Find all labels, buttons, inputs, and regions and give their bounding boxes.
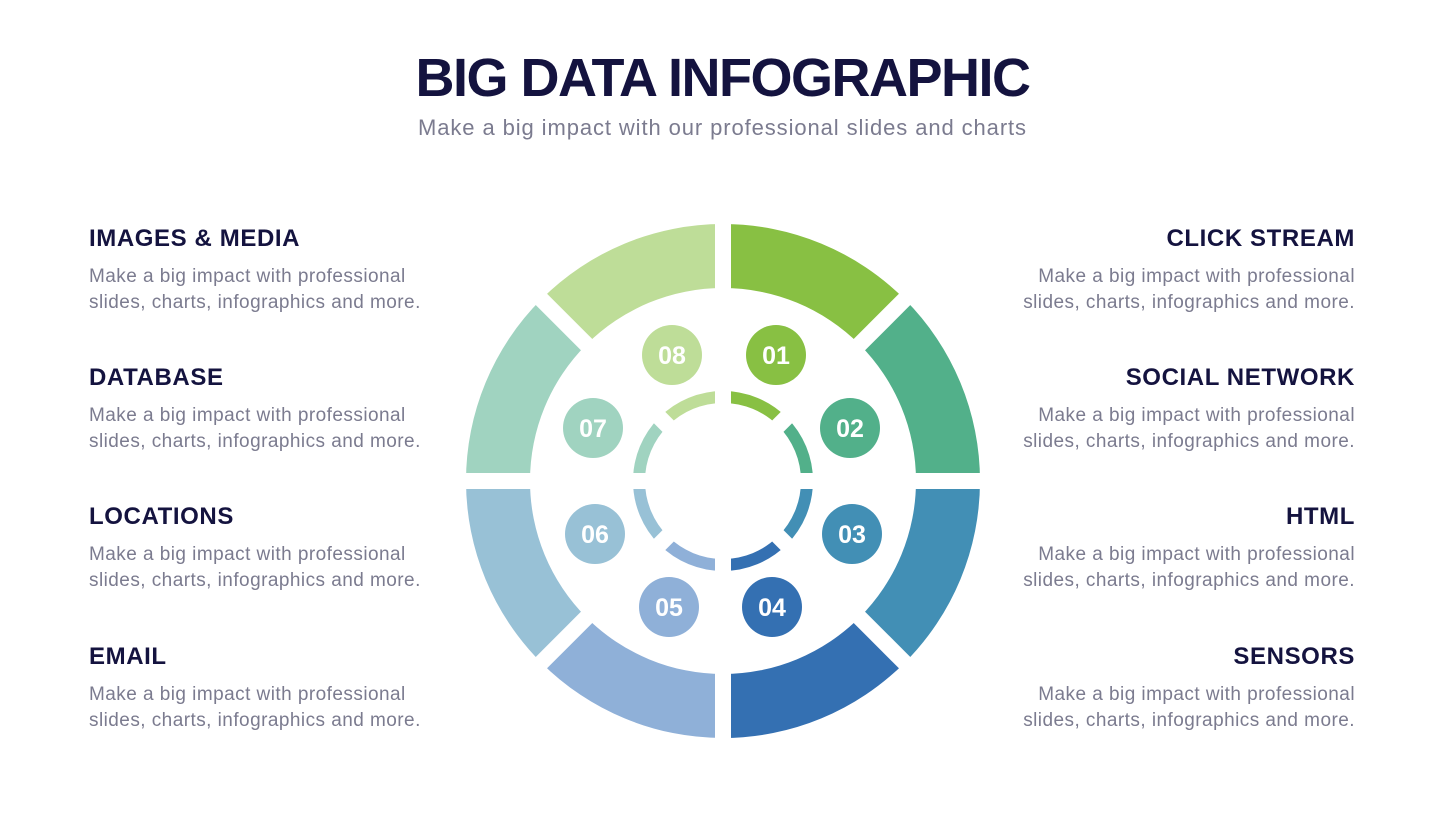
title: BIG DATA INFOGRAPHIC	[416, 48, 1029, 108]
item: locations	[89, 503, 421, 591]
item: images & media: slides, charts, infographics and more.	[89, 292, 421, 313]
item: images & media: Make a big impact with professional	[89, 266, 406, 287]
subtitle: Make a big impact with our professional slides and charts	[418, 115, 1027, 140]
item: click stream: CLICK STREAM	[1166, 225, 1355, 252]
item: click stream: Make a big impact with professional	[1038, 266, 1355, 287]
item: sensors	[1023, 643, 1355, 731]
item: database	[89, 364, 421, 452]
item: html: slides, charts, infographics and more.	[1023, 570, 1355, 591]
item: email	[89, 643, 421, 731]
item: email: EMAIL	[89, 643, 167, 670]
number circles: 01	[762, 342, 790, 370]
item: sensors: slides, charts, infographics and more.	[1023, 710, 1355, 731]
item: html: HTML	[1286, 503, 1355, 530]
item: social network: slides, charts, infographics and more.	[1023, 431, 1355, 452]
item: social network: Make a big impact with professional	[1038, 405, 1355, 426]
item: database: Make a big impact with professional	[89, 405, 406, 426]
item: database: slides, charts, infographics and more.	[89, 431, 421, 452]
item: locations: LOCATIONS	[89, 503, 234, 530]
item: click stream	[1023, 225, 1355, 313]
item: images & media	[89, 225, 421, 313]
item: click stream: slides, charts, infographics and more.	[1023, 292, 1355, 313]
item: sensors: Make a big impact with professional	[1038, 684, 1355, 705]
number circles: 06	[581, 521, 609, 549]
inner ring arcs	[639, 397, 807, 565]
item: database: DATABASE	[89, 364, 224, 391]
item: email: Make a big impact with professional	[89, 684, 406, 705]
number circles: 03	[838, 521, 866, 549]
number circles: 04	[758, 594, 786, 622]
item: social network	[1023, 364, 1355, 452]
item: social network: SOCIAL NETWORK	[1126, 364, 1355, 391]
number circles: 08	[658, 342, 686, 370]
item: sensors: SENSORS	[1233, 643, 1355, 670]
item: locations: slides, charts, infographics and more.	[89, 570, 421, 591]
number circles: 05	[655, 594, 683, 622]
item: html	[1023, 503, 1355, 591]
item: locations: Make a big impact with professional	[89, 544, 406, 565]
item: email: slides, charts, infographics and more.	[89, 710, 421, 731]
item: html: Make a big impact with professional	[1038, 544, 1355, 565]
number circles	[563, 325, 882, 637]
outer segments	[466, 224, 980, 738]
item: images & media: IMAGES & MEDIA	[89, 225, 300, 252]
number circles: 02	[836, 415, 864, 443]
number circles: 07	[579, 415, 607, 443]
